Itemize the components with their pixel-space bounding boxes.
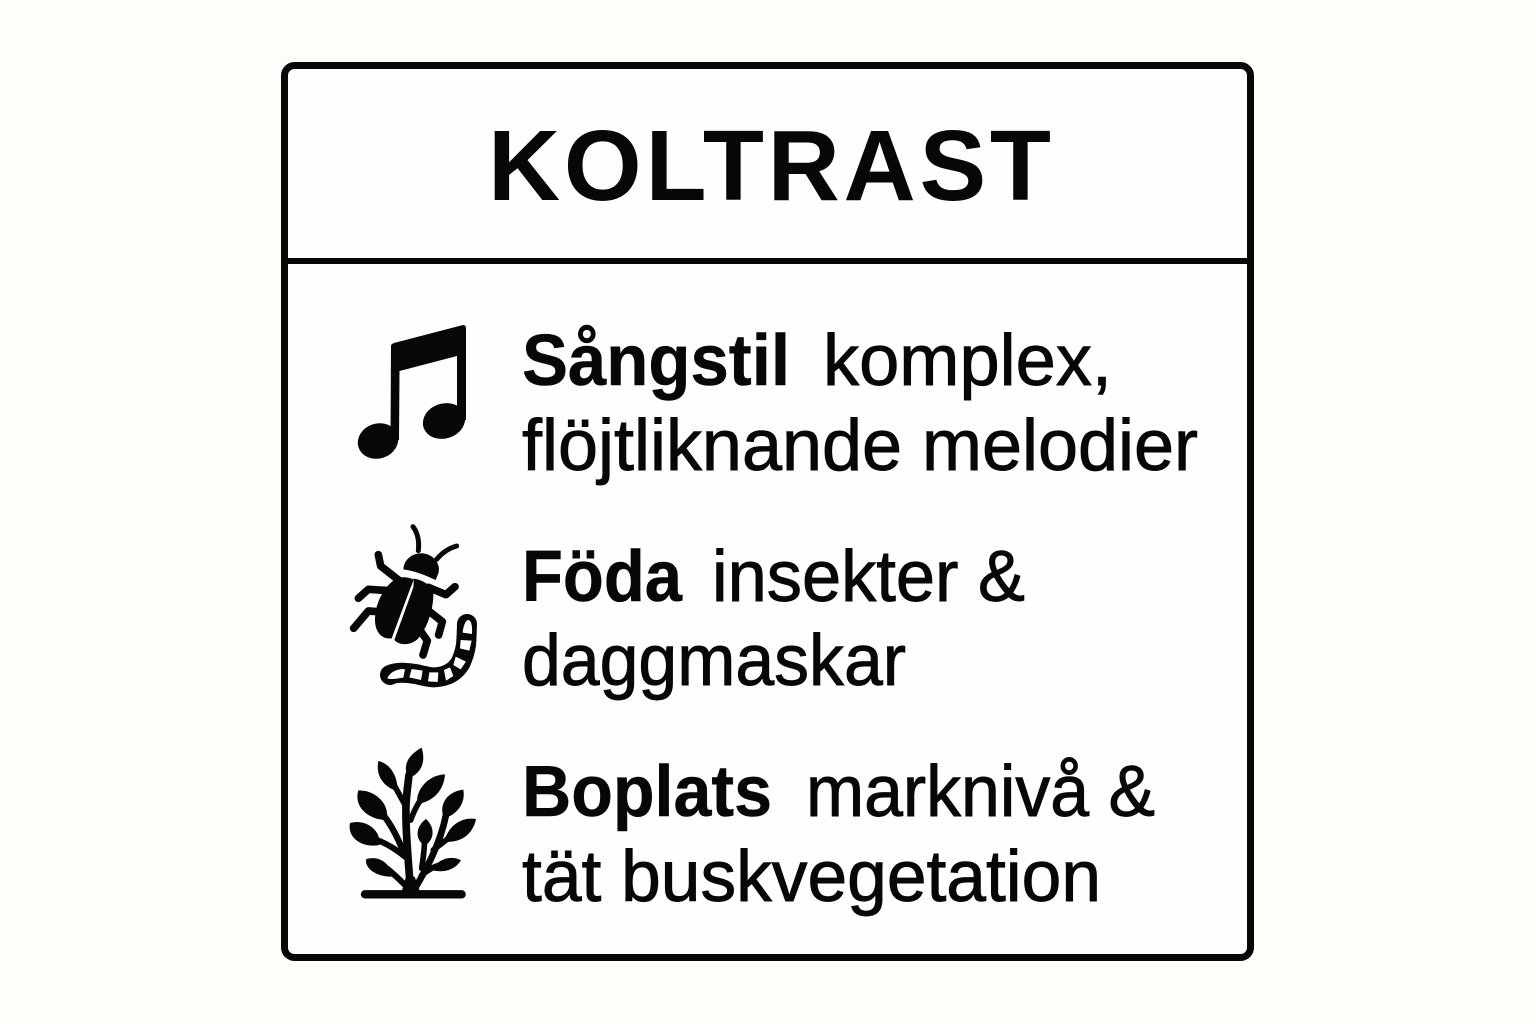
text block: food: Föda	[522, 537, 683, 617]
panel: koltrast card	[284, 66, 1251, 958]
icon: beetle and worm	[354, 527, 472, 682]
text block: song style	[522, 321, 1198, 486]
text block: food: insekter &	[712, 537, 1025, 617]
icon: shrub plant	[350, 748, 476, 894]
panel border	[284, 66, 1250, 958]
title: KOLTRAST	[488, 110, 1051, 222]
text block: nesting	[522, 752, 1155, 917]
text block: song style: Sångstil	[522, 321, 790, 401]
icon: music notes	[353, 325, 470, 464]
text block: nesting: marknivå &	[806, 752, 1155, 832]
text block: nesting: Boplats	[522, 752, 772, 832]
text block: food: daggmaskar	[522, 621, 906, 701]
text block: song style: komplex,	[823, 321, 1112, 401]
text block: nesting: tät buskvegetation	[522, 837, 1101, 917]
text block: song style: flöjtliknande melodier	[522, 406, 1198, 486]
text block: food	[522, 537, 1025, 701]
